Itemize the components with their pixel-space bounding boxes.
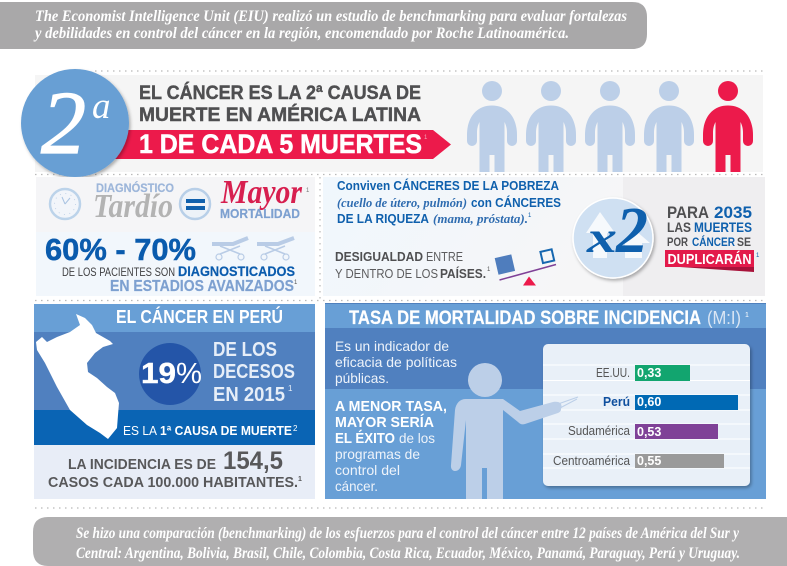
icon: equals (180, 189, 210, 219)
bar: Perú: Perú (603, 394, 630, 409)
text: indicator description: de los (399, 430, 435, 446)
text: indicator description: públicas. (335, 370, 389, 386)
panel: doubling by 2035: CÁNCER (692, 234, 735, 249)
panel: advanced stages statistic: 1 (294, 280, 298, 286)
text: indicator description: EL ÉXITO (335, 430, 395, 447)
bar: Centroamérica: 0,55 (637, 454, 661, 468)
text: inequality: DESIGUALDAD (335, 249, 423, 264)
panel: cancer in Peru (34, 304, 315, 499)
panel: poverty and wealth cancers: 1 (528, 213, 532, 219)
panel: doubling by 2035 (573, 177, 765, 296)
footer note (33, 517, 787, 566)
panel: advanced stages statistic (36, 232, 315, 296)
heading: Peru: EL CÁNCER EN PERÚ (116, 306, 283, 327)
bar: Centroamérica: Centroamérica (553, 453, 631, 468)
panel: poverty and wealth cancers: con CÁNCERES (471, 195, 561, 210)
label: higher mortality: 1 (306, 188, 310, 194)
bar: Perú (603, 394, 738, 410)
heading: M:I ratio: TASA DE MORTALIDAD SOBRE INCIDENCIA (349, 308, 701, 329)
label: higher mortality: Mayor (220, 174, 303, 211)
header note: y debilidades en control del cáncer en la región, encomendado por Roche Latinoamérica. (33, 25, 569, 42)
text: incidence: CASOS CADA 100.000 HABITANTES. (48, 475, 298, 491)
panel: advanced stages statistic: 60% - 70% (45, 232, 196, 267)
text: first cause: 1ª CAUSA DE MUERTE (160, 423, 292, 438)
label: late diagnosis: Tardío (93, 188, 173, 225)
panel: doubling by 2035: MUERTES (694, 219, 752, 235)
text: inequality: 1 (487, 267, 491, 273)
icon: x2 badge (573, 194, 653, 278)
panel: late diagnosis (36, 174, 315, 232)
label: late diagnosis: DIAGNÓSTICO (96, 180, 174, 195)
icon: presenter figure (451, 363, 578, 499)
text: indicator description: cáncer. (335, 478, 378, 494)
panel: doubling by 2035: POR (667, 235, 688, 249)
panel: doubling by 2035: SE (737, 235, 751, 249)
text: indicator description: A MENOR TASA, (335, 398, 447, 415)
bar: Sudamérica (568, 423, 718, 439)
label: duplicarán: 1 (756, 253, 760, 259)
text: indicator description: MAYOR SERÍA (335, 414, 434, 431)
text: indicator description: control del (335, 462, 400, 478)
text: indicator description: programas de (335, 446, 420, 462)
icons: five people, one in red (467, 81, 753, 172)
text: incidence: 154,5 (223, 447, 283, 475)
text: first cause: 2 (293, 424, 298, 433)
badge: 2a (21, 69, 129, 177)
label: duplicarán: DUPLICARÁN (668, 251, 752, 268)
text: indicator description (335, 338, 457, 494)
panel: mortality to incidence ratio (325, 303, 766, 499)
badge: 19 percent: % (176, 358, 202, 390)
text: first cause: ES LA (123, 423, 157, 438)
panel: doubling by 2035: LAS (667, 219, 691, 235)
text: share of deaths: EN 2015 (213, 384, 285, 406)
label: duplicarán (665, 250, 760, 272)
header note (0, 2, 647, 49)
heading: M:I ratio: 1 (745, 312, 749, 319)
text: share of deaths: 1 (288, 384, 293, 393)
panel: poverty and wealth cancers: (mama, próstata). (433, 211, 528, 226)
bar: EE.UU.: EE.UU. (596, 365, 630, 380)
text: share of deaths (213, 339, 295, 406)
map: Peru (36, 314, 119, 439)
icon: unbalanced scale (495, 249, 556, 286)
badge: 2a: a (92, 86, 110, 127)
icon: x2 badge: 2 (615, 194, 648, 267)
text: share of deaths: DE LOS (213, 339, 277, 361)
icon: x2 badge: x (586, 213, 617, 262)
red arrow banner: 1 DE CADA 5 MUERTES (139, 129, 422, 159)
bar: Centroamérica (553, 453, 724, 468)
bar chart card (543, 344, 750, 486)
bar: Sudamérica: 0,53 (637, 425, 661, 439)
panel: advanced stages statistic: DIAGNOSTICADOS (178, 264, 295, 279)
heading: M:I ratio: (M:I) (707, 308, 741, 328)
text: inequality: ENTRE (426, 249, 463, 264)
label: higher mortality: MORTALIDAD (220, 207, 300, 221)
panel: poverty and wealth cancers: (cuello de útero, pulmón) (337, 195, 467, 210)
red arrow banner: 1 (424, 135, 428, 141)
text: incidence (48, 447, 302, 491)
text: indicator description: eficacia de políticas (335, 354, 457, 370)
text: incidence: LA INCIDENCIA ES DE (68, 457, 216, 473)
panel: poverty and wealth cancers: DE LA RIQUEZA (337, 211, 430, 226)
text: incidence: 1 (298, 476, 302, 483)
panel: advanced stages statistic: DE LOS PACIENTES SON (62, 265, 175, 279)
text: inequality: Y DENTRO DE LOS (335, 266, 438, 281)
text: indicator description: Es un indicador de (335, 338, 449, 354)
text: share of deaths: DECESOS (213, 361, 295, 383)
panel: poverty and wealth cancers: Conviven CÁNCERES DE LA POBREZA (337, 178, 560, 193)
heading: second cause: MUERTE EN AMÉRICA LATINA (139, 104, 421, 126)
header note: The Economist Intelligence Unit (EIU) realizó un estudio de benchmarking para evaluar fortalezas (35, 8, 627, 25)
heading: second cause: EL CÁNCER ES LA 2ª CAUSA DE (139, 82, 421, 104)
heading: second cause (139, 82, 421, 126)
badge: 19 percent (139, 343, 202, 405)
bar: EE.UU. (596, 365, 690, 381)
panel: advanced stages statistic: EN ESTADIOS AVANZADOS (110, 278, 294, 295)
badge: 19 percent: 19 (141, 358, 176, 390)
bar: Sudamérica: Sudamérica (568, 423, 631, 438)
badge: 2a: 2 (41, 74, 86, 173)
icon: clock (50, 189, 80, 219)
icon: stretchers (212, 238, 294, 260)
panel: poverty and wealth cancers (323, 177, 623, 296)
panel: doubling by 2035: PARA (667, 203, 709, 222)
panel: doubling by 2035: 2035 (714, 203, 752, 222)
text: inequality: PAÍSES. (440, 266, 486, 281)
bar: Perú: 0,60 (637, 395, 661, 409)
bar: EE.UU.: 0,33 (637, 366, 661, 380)
text: inequality (335, 249, 491, 281)
